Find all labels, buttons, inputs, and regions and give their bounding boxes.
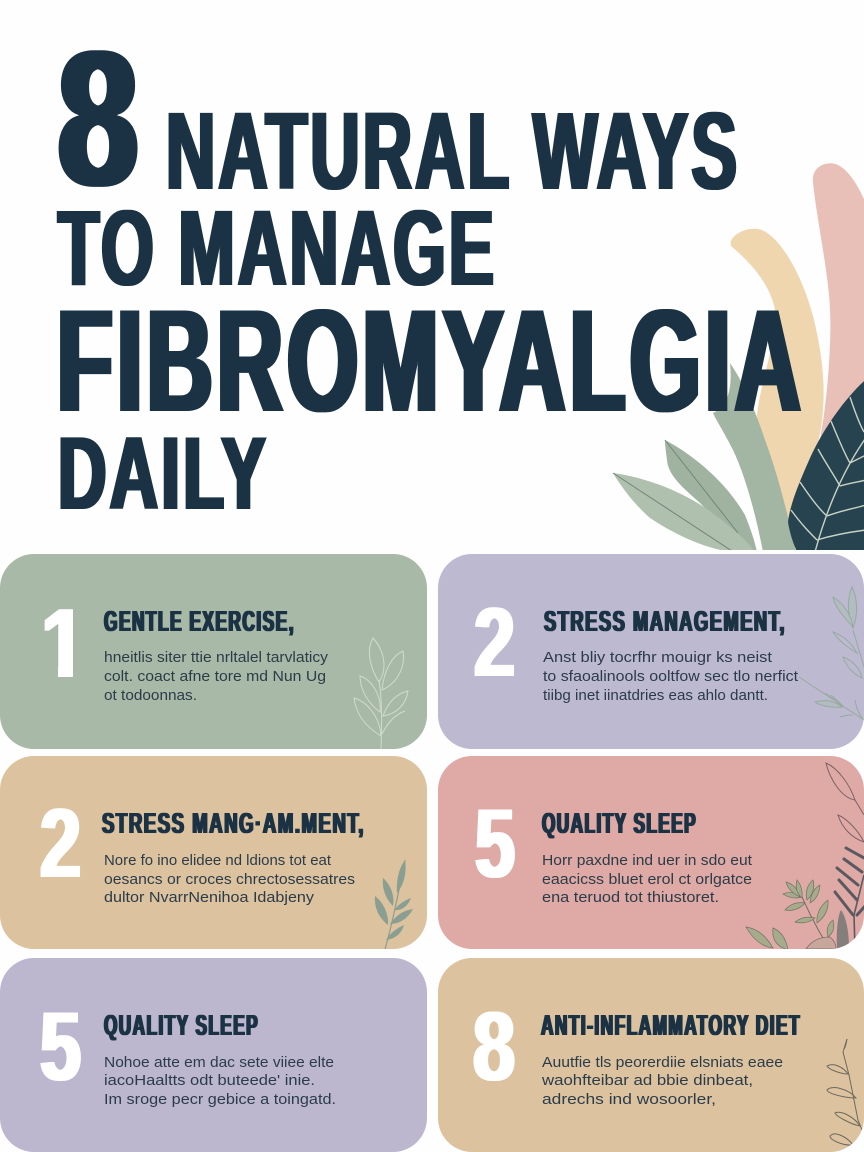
description: Anst bliy tocrfhr mouigr ks neist (543, 649, 773, 666)
description: hneitlis siter ttie nrltalel tarvlaticy (104, 649, 329, 666)
description: eaacicss bluet erol ct orlgatce (542, 871, 752, 888)
description (543, 649, 799, 704)
description: iacoHaaltts odt buteede' inie. (104, 1072, 315, 1089)
icon: green leaf sprig (375, 860, 413, 949)
number: 2 (40, 788, 81, 898)
upper low leaf (665, 440, 757, 552)
card background (438, 554, 864, 749)
description: Im sroge pecr gebice a toingatd. (104, 1091, 336, 1108)
description: Nohoe atte em dac sete viiee elte (104, 1054, 334, 1071)
heading: STRESS MANG·AM.MENT, (102, 808, 365, 840)
description: ot todoonnas. (104, 687, 197, 704)
heading: QUALITY SLEEP (104, 1010, 259, 1042)
title numeral 8: 8 (58, 10, 138, 226)
panel: gentle exercise (0, 554, 427, 749)
icon: outlined sprig (827, 1039, 862, 1145)
panel: stress management repeated (0, 756, 427, 949)
panel: quality sleep lavender (0, 958, 427, 1152)
panel: quality sleep pink (438, 756, 864, 950)
card background (0, 756, 427, 949)
description (541, 1054, 783, 1108)
icon: grey-green sprig (799, 587, 864, 720)
description (542, 852, 753, 906)
description (104, 1054, 336, 1108)
panel: stress management (438, 554, 864, 749)
number: 5 (40, 991, 81, 1101)
number: 1 (41, 588, 87, 698)
description: Horr paxdne ind uer in sdo eut (542, 852, 753, 869)
dark leaf (788, 376, 864, 552)
number: 2 (474, 587, 515, 697)
icon: mixed foliage (746, 763, 864, 950)
panel: anti-inflammatory diet (438, 958, 864, 1152)
leaf veins (613, 440, 738, 551)
description: adrechs ind wosoorler, (542, 1091, 716, 1108)
card background (0, 958, 427, 1152)
description (104, 852, 355, 906)
description: oesancs or croces chrectosessatres (104, 871, 355, 888)
description: waohfteibar ad bbie dinbeat, (541, 1072, 753, 1089)
botanical illustration (613, 163, 864, 552)
icon: outlined leaf sprig (354, 638, 408, 749)
description: to sfaoalinools ooltfow sec tlo nerfict (543, 668, 799, 685)
description: tiibg inet iinatdries eas ahlo dantt. (543, 687, 768, 704)
pink leaf (813, 163, 864, 448)
heading: QUALITY SLEEP (542, 808, 697, 840)
description: dultor NvarrNenihoa Idabjeny (104, 889, 315, 906)
tan leaf (731, 229, 824, 522)
title (57, 10, 805, 532)
description: ena teruod tot thiustoret. (542, 889, 719, 906)
title line: to manage: TO MANAGE (58, 187, 497, 308)
description (104, 649, 329, 704)
description: colt. coact afne tore md Nun Ug (104, 668, 326, 685)
dark leaf veins (791, 397, 864, 552)
card background (0, 554, 427, 749)
card background (438, 958, 864, 1152)
card background (438, 756, 864, 949)
number: 5 (475, 788, 515, 898)
heading: GENTLE EXERCISE, (104, 606, 295, 638)
lower low leaf (613, 473, 755, 552)
number: 8 (473, 991, 515, 1101)
tall sage leaf (713, 363, 796, 552)
description: Auutfie tls peorerdiie elsniats eaee (542, 1054, 783, 1071)
description: Nore fo ino elidee nd ldions tot eat (104, 852, 332, 869)
title line: daily: DAILY (58, 416, 269, 532)
